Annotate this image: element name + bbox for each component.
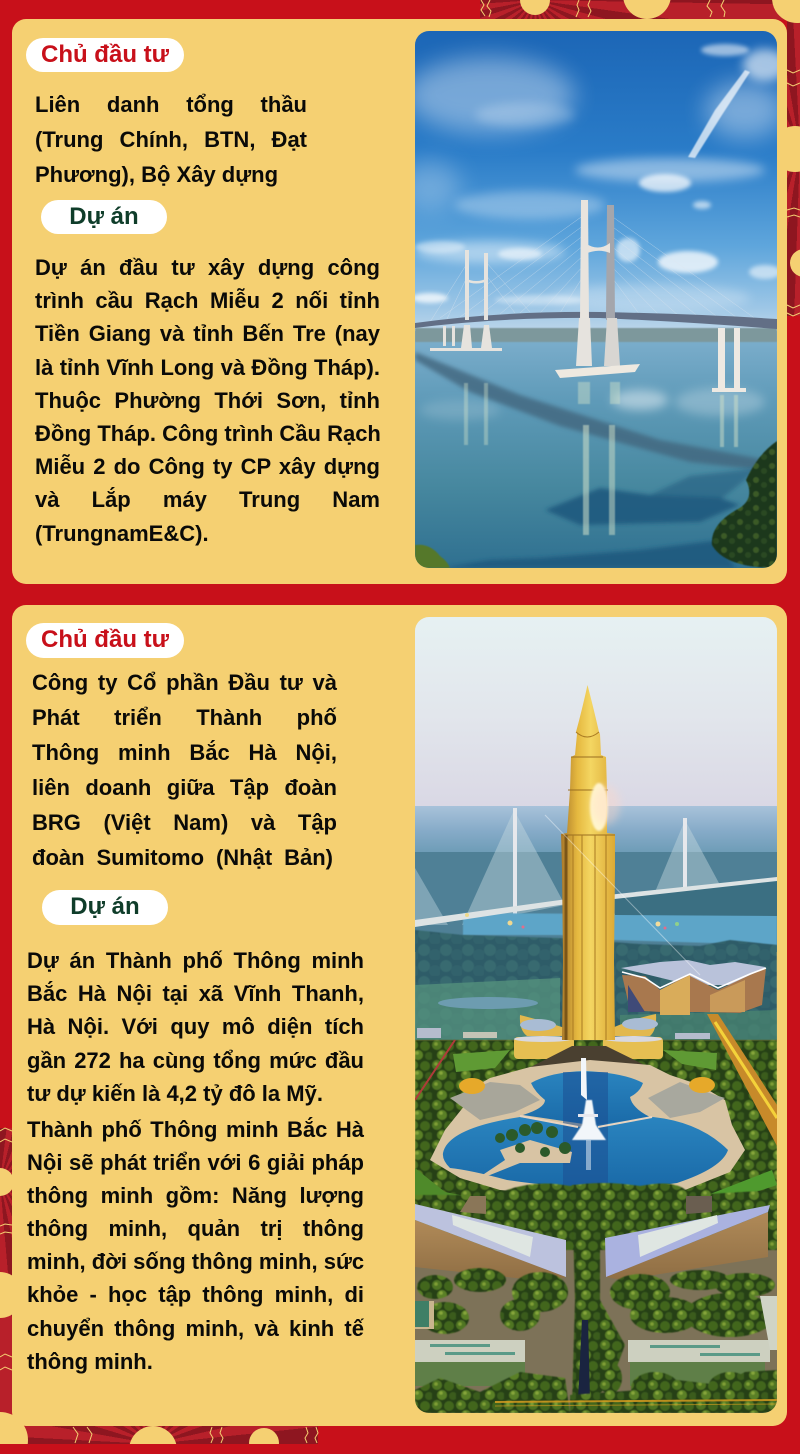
river — [463, 913, 777, 945]
mid tree clusters — [417, 1268, 775, 1337]
text: smart city project paragraph 2 — [27, 1117, 364, 1374]
light strip — [495, 1400, 777, 1402]
text: bridge project description: Dự án đầu tư xây dựng công — [35, 255, 380, 280]
bridge deck — [415, 312, 777, 329]
image: Bắc Hà Nội smart city tower — [415, 617, 777, 1413]
text: smart city project paragraph 1: Bắc Hà Nội tại xã Vĩnh Thanh, — [27, 981, 364, 1006]
side piers — [712, 328, 746, 392]
text: bridge investor — [35, 92, 307, 187]
central tree avenue — [572, 1185, 625, 1405]
far forest — [415, 852, 777, 952]
text: smart city project paragraph 1: tư dự kiến là 4,2 tỷ đô la Mỹ. — [27, 1081, 323, 1106]
text: bridge project description — [35, 255, 381, 546]
left lower building — [415, 1301, 525, 1386]
heading: Dự án (smart city): Dự án — [70, 893, 140, 920]
text: bridge project description: là tỉnh Vĩnh Long và Đồng Tháp). — [35, 355, 380, 380]
clouds — [400, 44, 787, 312]
cable stayed bridges far — [415, 808, 720, 933]
text: smart city project paragraph 2: chuyển thông minh, và kinh tế — [27, 1316, 364, 1341]
promenades over lake — [520, 1116, 652, 1127]
golden tower — [545, 685, 700, 1040]
upper lake — [523, 1071, 650, 1126]
water — [415, 331, 777, 568]
road left — [415, 1040, 455, 1100]
text: bridge investor: (Trung Chính, BTN, Đạt — [35, 127, 307, 152]
image: Rạch Miễu 2 cable-stayed bridge — [415, 31, 777, 568]
heading: Chủ đầu tư (bridge): Chủ đầu tư — [41, 41, 169, 68]
text: smart city project paragraph 2: thông minh. — [27, 1349, 153, 1374]
right lower building — [628, 1296, 777, 1386]
panel: Rạch Miễu 2 bridge — [12, 19, 787, 584]
text: smart city project paragraph 1: Hà Nội. Với quy mô diện tích — [27, 1014, 364, 1039]
text: smart city investor: Công ty Cổ phần Đầu tư và — [32, 670, 337, 695]
text: bridge investor: Phương), Bộ Xây dựng — [35, 162, 278, 187]
text: smart city investor: liên doanh giữa Tập đoàn — [32, 775, 337, 800]
forest strip beyond river right — [615, 880, 777, 916]
panel: Bắc Hà Nội smart city — [12, 605, 787, 1426]
far road — [415, 877, 777, 927]
text: smart city project paragraph 2: Nội sẽ phát triển với 6 giải pháp — [27, 1150, 364, 1175]
small tower — [430, 250, 502, 351]
heading: Dự án (smart city) — [42, 890, 168, 925]
lawns — [415, 978, 777, 1040]
foreground trees — [415, 1362, 777, 1413]
tree belt below lake — [415, 1183, 777, 1250]
text: smart city investor — [32, 670, 338, 870]
plaza sand — [430, 1060, 745, 1200]
tower reflections — [464, 382, 738, 535]
main tower — [555, 200, 640, 378]
text: smart city project paragraph 2: thông minh, quản trị thông — [27, 1216, 364, 1241]
trees foreground — [712, 441, 777, 568]
lake reflection — [563, 1072, 608, 1190]
road right — [707, 1014, 777, 1146]
text: smart city project paragraph 2: minh, đời sống thông minh, sức — [27, 1249, 364, 1274]
heading: Dự án (bridge) — [41, 200, 167, 234]
text: bridge project description: và Lắp máy Trung Nam — [35, 487, 380, 512]
lower ground — [415, 1205, 777, 1413]
central path — [578, 1320, 590, 1400]
text: bridge project description: Thuộc Phường Thới Sơn, tỉnh — [35, 388, 380, 413]
treeline on far bank — [415, 328, 777, 342]
water shadows — [440, 468, 760, 568]
heading: Chủ đầu tư (smart city): Chủ đầu tư — [41, 626, 169, 653]
fountains — [572, 1058, 606, 1170]
sky — [415, 31, 777, 331]
heading: Dự án (bridge): Dự án — [69, 203, 139, 230]
lower lake — [443, 1117, 728, 1188]
left and right plazas — [450, 1082, 540, 1120]
text: bridge investor: Liên danh tổng thầu — [35, 92, 307, 117]
reflected clouds — [420, 388, 765, 420]
text: smart city project paragraph 1: Dự án Thành phố Thông minh — [27, 948, 364, 973]
foliage lower left — [415, 545, 450, 568]
right wing building — [605, 1196, 770, 1280]
text: smart city project paragraph 1 — [27, 948, 364, 1106]
tower base drums — [514, 1014, 665, 1075]
text: smart city investor: BRG (Việt Nam) và Tập — [32, 810, 337, 835]
text: bridge project description: trình cầu Rạch Miễu 2 nối tỉnh — [35, 288, 380, 313]
text: smart city project paragraph 1: gần 272 ha cùng tổng mức đầu — [27, 1048, 364, 1073]
balloons — [465, 913, 679, 930]
text: bridge project description: Đồng Tháp. Công trình Cầu Rạch — [35, 421, 381, 446]
heading: Chủ đầu tư (smart city) — [26, 623, 184, 658]
island with palms — [478, 1122, 572, 1178]
sky — [415, 617, 777, 812]
left wing building — [415, 1196, 566, 1281]
text: smart city investor: Thông minh Bắc Hà Nội, — [32, 740, 337, 765]
mid forest — [415, 930, 777, 1040]
distant land — [415, 806, 777, 856]
text: bridge project description: Tiền Giang và tỉnh Bến Tre (nay — [35, 321, 380, 346]
text: smart city project paragraph 2: khỏe - học tập thông minh, di — [27, 1282, 364, 1307]
stadium — [621, 960, 766, 1015]
text: bridge project description: (TrungnamE&C). — [35, 521, 209, 546]
text: bridge project description: Miễu 2 do Công ty CP xây dựng — [35, 454, 380, 479]
ground around plaza — [415, 1040, 777, 1210]
text: smart city project paragraph 2: Thành phố Thông minh Bắc Hà — [27, 1117, 364, 1142]
text: smart city investor: đoàn Sumitomo (Nhật Bản) — [32, 845, 333, 870]
text: smart city investor: Phát triển Thành phố — [32, 705, 337, 730]
bridge reflection — [415, 352, 777, 472]
heading: Chủ đầu tư (bridge) — [26, 38, 184, 72]
bridge cables — [430, 215, 760, 323]
text: smart city project paragraph 2: thông minh gồm: Năng lượng — [27, 1183, 364, 1208]
lawn patches — [453, 1050, 510, 1072]
